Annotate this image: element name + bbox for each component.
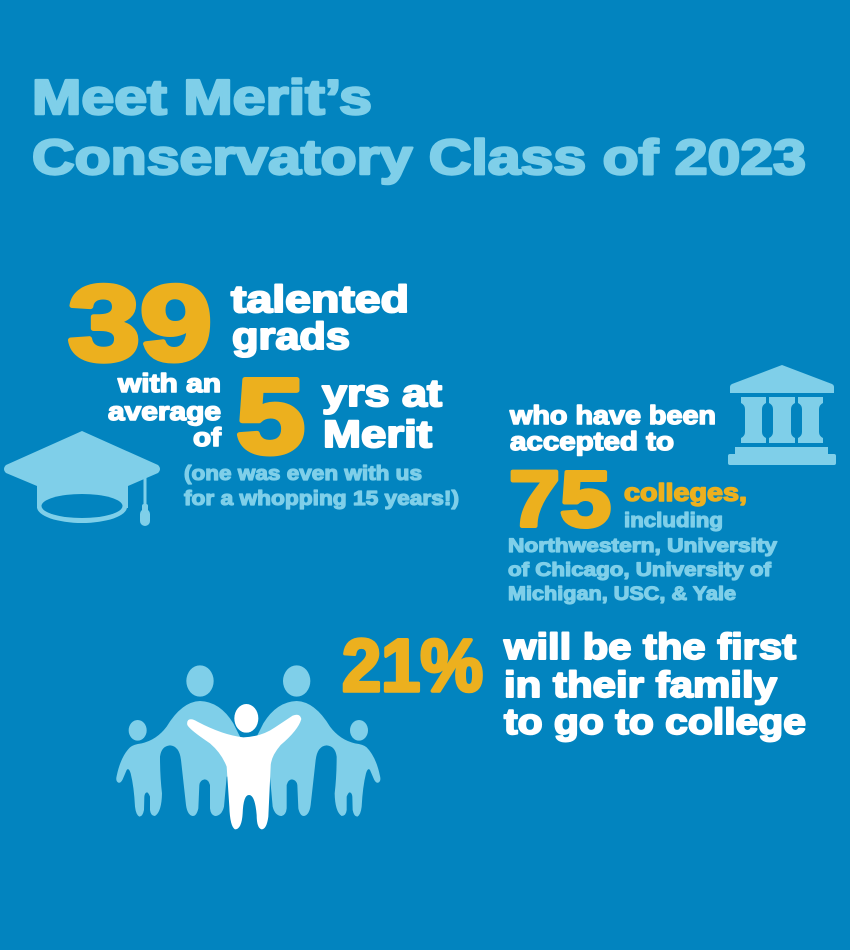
icon: family group	[116, 665, 380, 829]
list of colleges: of Chicago, University of	[508, 560, 772, 581]
stat: average of 5 years at Merit: with an	[117, 368, 221, 398]
stat: 21% first in family: to go to college	[504, 701, 806, 742]
list of colleges: Michigan, USC, & Yale	[508, 584, 736, 605]
stat: 39 talented grads: talented	[231, 279, 409, 321]
stat: 21% first in family: in their family	[504, 664, 777, 705]
stat: 39 talented grads	[68, 263, 409, 383]
stat: accepted to 75 colleges: accepted to	[510, 426, 674, 456]
stat: average of 5 years at Merit	[108, 356, 442, 476]
note: 15 years: (one was even with us	[184, 463, 422, 485]
stat: 39 talented grads: grads	[232, 316, 350, 358]
stat: accepted to 75 colleges: who have been	[509, 400, 716, 430]
stat: 21% first in family	[342, 624, 806, 742]
stat: 21% first in family: will be the first	[503, 626, 796, 667]
list of colleges: Northwestern, University	[508, 536, 778, 557]
stat: 39 talented grads: 39	[68, 263, 212, 383]
title: Conservatory Class of 2023	[32, 131, 806, 185]
note: 15 years: for a whopping 15 years!)	[184, 488, 459, 510]
stat: average of 5 years at Merit: Merit	[323, 414, 432, 456]
list of colleges	[508, 536, 778, 605]
title: Meet Merit’s	[32, 71, 372, 125]
stat: 21% first in family: 21%	[342, 624, 483, 707]
stat: average of 5 years at Merit: yrs at	[322, 373, 442, 415]
icon: college building	[728, 365, 836, 465]
stat: average of 5 years at Merit: average	[108, 396, 221, 426]
stat: accepted to 75 colleges	[509, 400, 747, 543]
title	[32, 71, 806, 185]
stat: average of 5 years at Merit: 5	[236, 356, 305, 476]
stat: accepted to 75 colleges: including	[624, 510, 723, 532]
stat: accepted to 75 colleges: 75	[509, 454, 611, 543]
icon: graduation cap	[4, 431, 160, 526]
stat: average of 5 years at Merit: of	[193, 422, 221, 452]
stat: accepted to 75 colleges: colleges,	[624, 479, 747, 507]
note: 15 years	[184, 463, 459, 510]
